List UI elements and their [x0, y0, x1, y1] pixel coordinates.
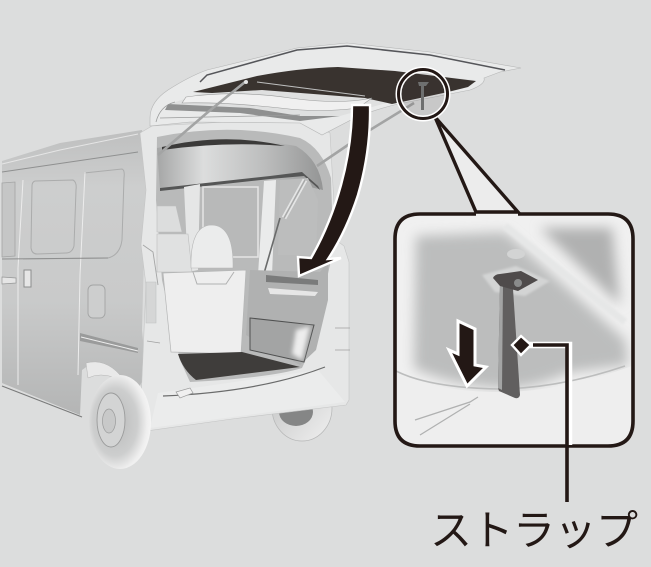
van: rear wheel	[272, 375, 332, 441]
tailgate	[150, 43, 521, 166]
gas strut inside	[284, 180, 305, 218]
dark inner panel	[193, 67, 476, 104]
van: interior opening	[156, 130, 333, 382]
callout border	[395, 214, 633, 446]
door handles	[2, 277, 16, 284]
fuel lid	[88, 285, 105, 318]
inset shaded tailgate surface	[414, 232, 628, 388]
van: rear frame and bumper	[140, 118, 350, 431]
van: side body	[2, 130, 146, 417]
left gas strut	[158, 82, 245, 155]
big curved arrow	[298, 105, 370, 276]
strap	[493, 271, 538, 398]
label: strap: ストラップ	[430, 507, 638, 554]
right gas strut	[317, 103, 414, 166]
strap mount plate	[482, 266, 550, 296]
inset rivet	[507, 249, 525, 259]
lower door / cargo interior	[246, 262, 328, 365]
far door window frame	[184, 184, 200, 272]
leader line	[512, 336, 569, 502]
cargo floor mat	[178, 352, 300, 380]
side window panel	[23, 169, 124, 259]
callout wedge from circle	[435, 117, 518, 212]
seats	[157, 206, 246, 354]
panel: callout inset	[395, 214, 633, 447]
down arrow	[449, 321, 486, 386]
detail circle on strap	[398, 70, 448, 118]
van: front wheel	[89, 375, 151, 469]
ceiling	[157, 140, 323, 190]
side moulding	[80, 333, 138, 353]
